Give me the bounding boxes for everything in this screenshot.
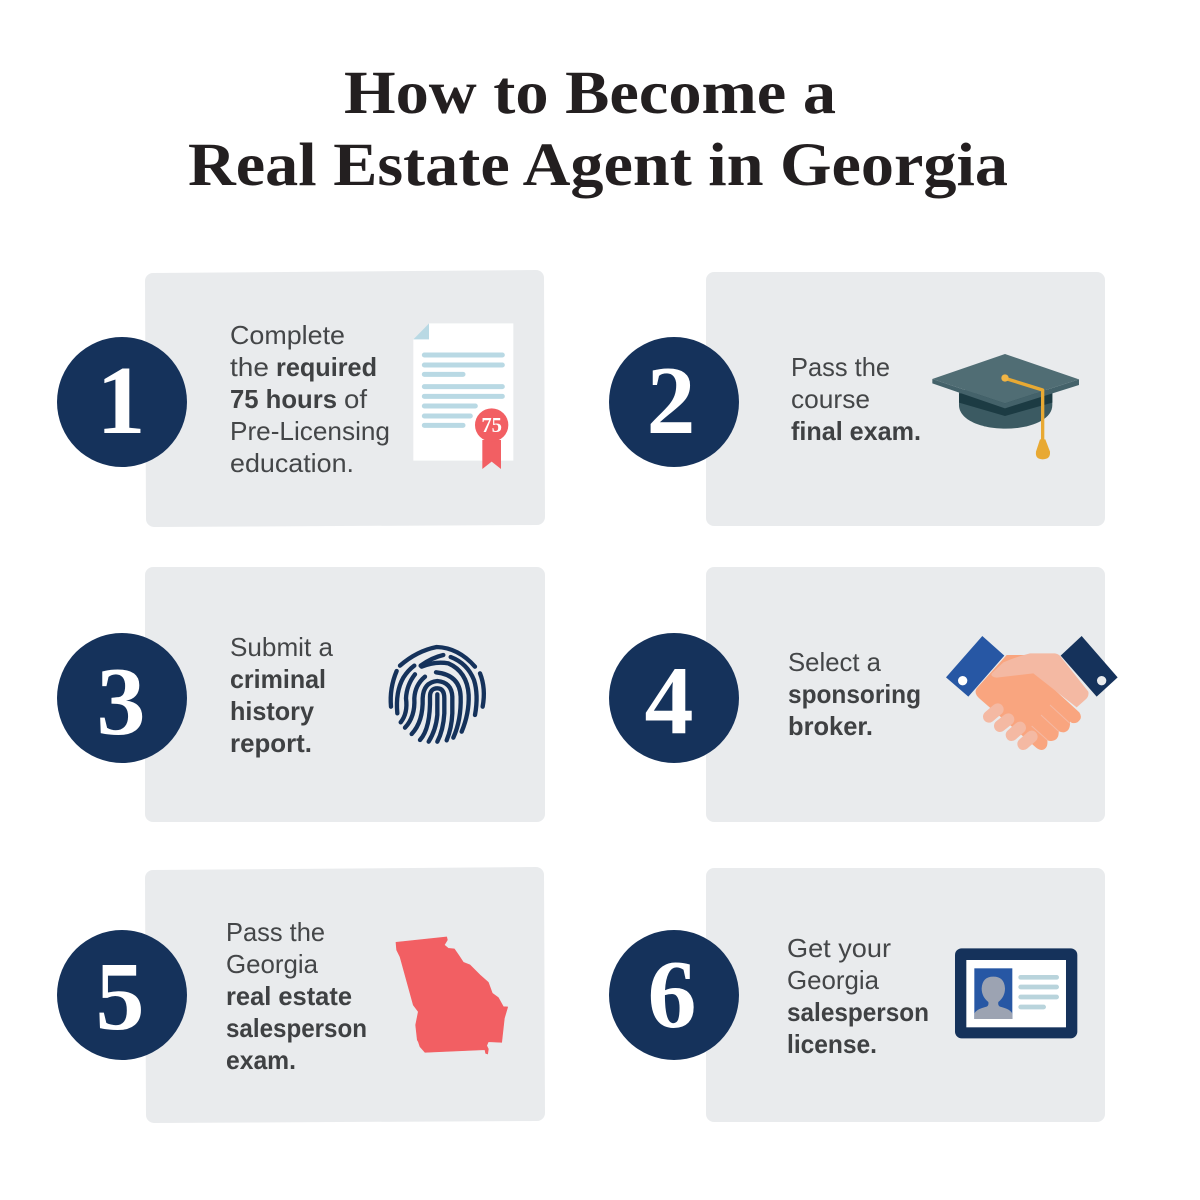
- step 5 text: real estate: [226, 981, 352, 1011]
- card 6: [706, 868, 1105, 1122]
- step 6 text: [787, 933, 929, 1059]
- step 3 text: [230, 632, 334, 758]
- step 3 text: criminal: [230, 664, 326, 694]
- card 1: [153, 278, 537, 519]
- title: How to Become a: [344, 60, 836, 127]
- step 1 text: 75 hours: [230, 384, 337, 414]
- icon: graduation cap: [932, 354, 1079, 459]
- number badge 1: [57, 337, 187, 467]
- number badge 1: 1: [96, 347, 146, 455]
- number badge 6: [609, 930, 739, 1060]
- card 4: [706, 567, 1105, 822]
- step 3 text: Submit a: [230, 632, 334, 662]
- step 2 text: [791, 352, 921, 446]
- step 4 text: sponsoring: [788, 679, 921, 709]
- icon: certificate document with 75 seal: [413, 323, 513, 469]
- card 5: [153, 875, 537, 1115]
- panel: step 5: [57, 875, 537, 1115]
- card 2: [706, 272, 1105, 526]
- step 4 text: broker.: [788, 711, 873, 741]
- panel: step 1: [57, 278, 537, 519]
- step 1 text: education.: [230, 448, 354, 478]
- step 6 text: license.: [787, 1029, 877, 1059]
- panel: step 6: [609, 868, 1105, 1122]
- step 1 text: of: [344, 384, 368, 414]
- step 5 text: Pass the: [226, 917, 325, 947]
- step 4 text: [788, 647, 921, 741]
- number badge 4: 4: [644, 647, 694, 755]
- step 1 text: Pre-Licensing: [230, 416, 390, 446]
- step 2 text: final exam.: [791, 416, 921, 446]
- number badge 4: [609, 633, 739, 763]
- number badge 3: 3: [96, 648, 146, 756]
- step 1 text: [230, 320, 390, 478]
- title: [188, 60, 1008, 199]
- icon: certificate document with 75 seal: 75: [481, 415, 502, 437]
- step 6 text: Get your: [787, 933, 891, 963]
- step 5 text: [226, 917, 367, 1075]
- step 5 text: exam.: [226, 1045, 296, 1075]
- number badge 5: [57, 930, 187, 1060]
- step 6 text: salesperson: [787, 997, 929, 1027]
- panel: step 3: [57, 567, 545, 822]
- number badge 2: [609, 337, 739, 467]
- number badge 3: [57, 633, 187, 763]
- icon: fingerprint: [391, 647, 484, 742]
- step 2 text: Pass the: [791, 352, 890, 382]
- step 4 text: Select a: [788, 647, 882, 677]
- panel: step 2: [609, 272, 1105, 526]
- card 3: [145, 567, 545, 822]
- title: Real Estate Agent in Georgia: [188, 132, 1008, 199]
- step 1 text: Complete: [230, 320, 345, 350]
- icon: Georgia state map: [396, 937, 508, 1054]
- step 5 text: salesperson: [226, 1013, 367, 1043]
- step 1 text: required: [276, 352, 377, 382]
- step 2 text: course: [791, 384, 870, 414]
- icon: handshake: [946, 636, 1118, 750]
- panel: step 4: [609, 567, 1118, 822]
- step 3 text: history: [230, 696, 315, 726]
- step 1 text: the: [230, 352, 269, 382]
- number badge 5: 5: [96, 943, 144, 1051]
- number badge 2: 2: [646, 347, 696, 455]
- number badge 6: 6: [648, 941, 696, 1049]
- step 6 text: Georgia: [787, 965, 880, 995]
- icon: ID license card: [955, 948, 1077, 1038]
- step 3 text: report.: [230, 728, 312, 758]
- step 5 text: Georgia: [226, 949, 319, 979]
